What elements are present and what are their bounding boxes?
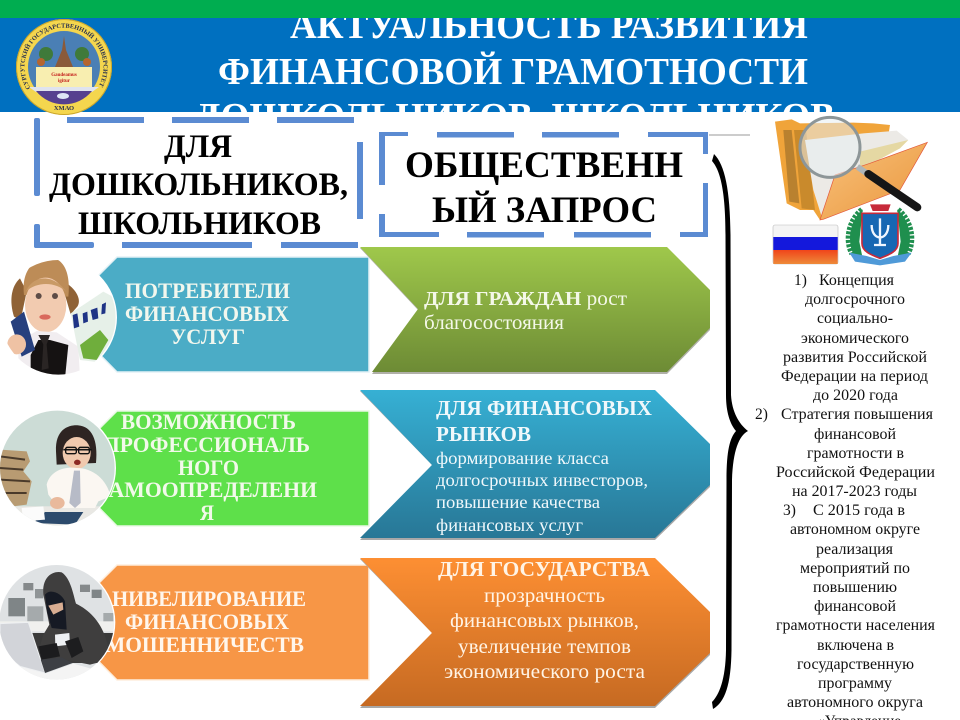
arrow panel: for financial markets: формирование класса	[436, 448, 609, 468]
text block: strategic documents list: государственную	[797, 656, 914, 673]
text block: strategic documents list: мероприятий по	[800, 560, 910, 577]
arrow panel: for financial markets: повышение качества	[436, 492, 600, 512]
title: ФИНАНСОВОЙ ГРАМОТНОСТИ	[218, 51, 808, 93]
text block: strategic documents list: 3)	[783, 502, 796, 519]
text block: strategic documents list: экономического	[801, 330, 909, 347]
right curly brace	[712, 154, 748, 709]
title: ДОШКОЛЬНИКОВ, ШКОЛЬНИКОВ	[195, 96, 835, 138]
text block: strategic documents list: на 2017-2023 годы	[792, 483, 918, 500]
heading box: for preschoolers and schoolchildren: ДОШКОЛЬНИКОВ,	[49, 167, 348, 203]
header band	[0, 0, 960, 142]
university logo: ХМАО	[54, 105, 74, 112]
arrow panel: for financial markets: долгосрочных инвесторов,	[436, 470, 648, 490]
arrow panel: for citizens: ДЛЯ ГРАЖДАН рост	[424, 288, 627, 310]
heading box: for preschoolers and schoolchildren	[34, 117, 363, 248]
university logo: Gaudeamus	[51, 73, 77, 78]
photo: surprised girl with glasses	[0, 408, 117, 530]
heading box: for preschoolers and schoolchildren: ШКОЛЬНИКОВ	[78, 206, 321, 242]
text block: strategic documents list	[755, 272, 935, 720]
text block: strategic documents list: грамотности населения	[776, 617, 935, 634]
text block: strategic documents list: повышению	[813, 579, 897, 596]
text block: strategic documents list: включена в	[817, 637, 894, 654]
title	[195, 5, 835, 138]
arrow panel: for the state: ДЛЯ ГОСУДАРСТВА	[438, 557, 651, 581]
row 3 left: fraud levelling: НИВЕЛИРОВАНИЕ	[112, 586, 306, 611]
title: АКТУАЛЬНОСТЬ РАЗВИТИЯ	[290, 5, 808, 47]
icon: folders with magnifying glass	[775, 117, 927, 220]
heading box: public demand: ЫЙ ЗАПРОС	[432, 189, 657, 231]
heading box: public demand	[379, 132, 708, 238]
row 1 left: financial service consumers: УСЛУГ	[171, 324, 245, 349]
arrow panel: for the state: экономического роста	[444, 661, 645, 683]
photo: girl with card and money	[8, 260, 117, 375]
icon: Khanty-Mansi coat of arms	[848, 204, 912, 265]
text block: strategic documents list: Стратегия повышения	[781, 406, 933, 423]
text block: strategic documents list: Федерации на период	[781, 368, 928, 385]
text block: strategic documents list: 2)	[755, 406, 768, 423]
heading box: public demand: ОБЩЕСТВЕНН	[405, 145, 683, 186]
text block: strategic documents list: развития Российской	[783, 349, 927, 366]
row 2 left: professional self-determination: НОГО	[178, 455, 239, 480]
text block: strategic documents list: долгосрочного	[805, 291, 905, 308]
row 3 left: fraud levelling: ФИНАНСОВЫХ	[125, 609, 289, 634]
university logo: igitur	[58, 79, 71, 84]
text block: strategic documents list: Концепция	[819, 272, 894, 289]
row 2 left: professional self-determination: ПРОФЕССИОНАЛЬ	[103, 432, 310, 457]
university logo	[16, 19, 112, 115]
text block: strategic documents list: Российской Федерации	[776, 464, 935, 481]
row 1 left: financial service consumers: ФИНАНСОВЫХ	[125, 301, 289, 326]
row 3 left: fraud levelling: МОШЕННИЧЕСТВ	[105, 632, 304, 657]
arrow panel: for financial markets: финансовых услуг	[436, 515, 583, 535]
arrow panel: for the state: финансовых рынков,	[450, 610, 639, 632]
arrow panel: for financial markets	[360, 390, 710, 540]
arrow panel: for the state	[360, 557, 710, 708]
row 1 left: financial service consumers: ПОТРЕБИТЕЛИ	[125, 278, 290, 303]
arrow panel: for citizens: благосостояния	[424, 312, 564, 334]
text block: strategic documents list: социально-	[817, 310, 893, 327]
arrow panel: for financial markets: ДЛЯ ФИНАНСОВЫХ	[436, 396, 652, 420]
text block: strategic documents list: до 2020 года	[813, 387, 898, 404]
text block: strategic documents list: финансовой	[814, 598, 896, 615]
arrow panel: for financial markets: РЫНКОВ	[436, 422, 531, 446]
text block: strategic documents list: автономного округа	[787, 694, 923, 711]
row 2 left: professional self-determination: САМООПРЕДЕЛЕНИ	[94, 477, 317, 502]
arrow panel: for the state: прозрачность	[484, 585, 605, 607]
text block: strategic documents list: 1)	[794, 272, 807, 289]
text block: strategic documents list: грамотности в	[807, 445, 904, 462]
rule beside heading	[709, 134, 750, 136]
row 2 left: professional self-determination	[60, 409, 369, 526]
text block: strategic documents list: реализация	[816, 541, 893, 558]
row 3 left: fraud levelling	[60, 565, 369, 680]
text block: strategic documents list: автономном округе	[790, 521, 920, 538]
arrow panel: for citizens	[360, 247, 710, 374]
arrow panel: for the state: увеличение темпов	[458, 636, 631, 658]
icon: Russian flag	[773, 225, 838, 264]
text block: strategic documents list: С 2015 года в	[813, 502, 905, 519]
text block: strategic documents list: финансовой	[814, 426, 896, 443]
photo: hooded hacker with laptop	[0, 563, 117, 685]
heading box: for preschoolers and schoolchildren: ДЛЯ	[164, 129, 232, 165]
text block: strategic documents list: программу	[818, 675, 892, 692]
row 2 left: professional self-determination: Я	[200, 500, 214, 525]
row 1 left: financial service consumers	[60, 257, 369, 372]
university logo: СУРГУТСКИЙ ГОСУДАРСТВЕННЫЙ УНИВЕРСИТЕТ	[20, 23, 108, 90]
row 2 left: professional self-determination: ВОЗМОЖНОСТЬ	[121, 409, 296, 434]
